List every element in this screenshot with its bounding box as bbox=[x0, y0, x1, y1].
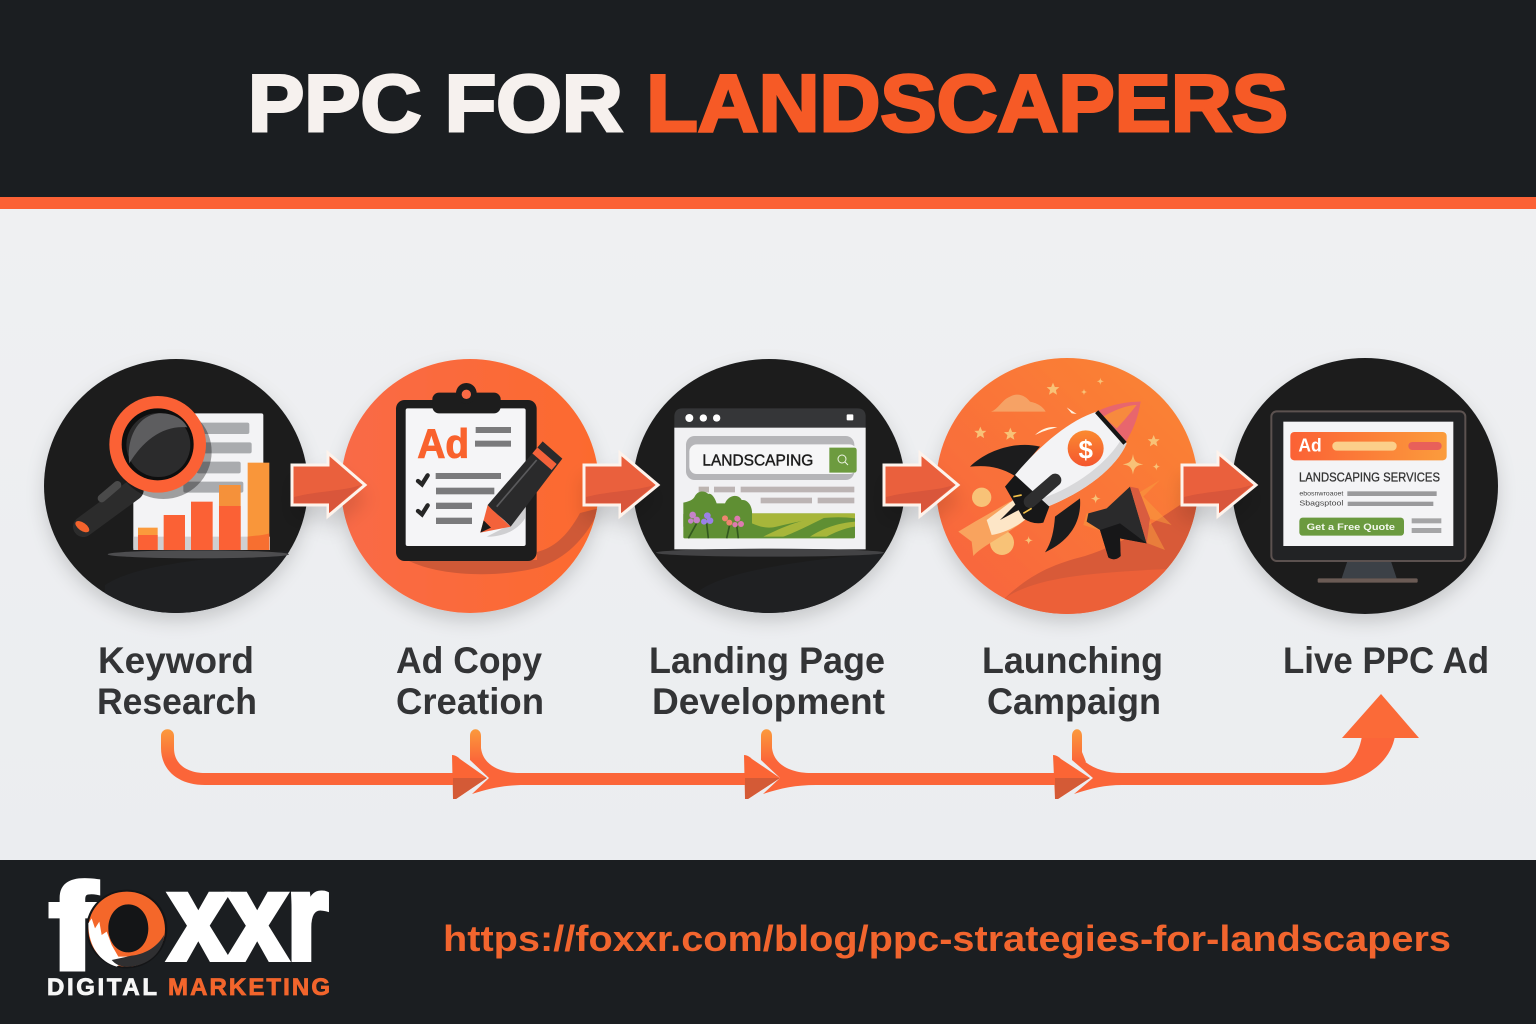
arrow: step 3 to 4 bbox=[884, 453, 958, 516]
label: landing page development bbox=[649, 640, 885, 722]
label: launching campaign: Campaign bbox=[987, 681, 1161, 722]
step 2 circle: ad copy creation bbox=[341, 359, 600, 613]
logo icon: fox tail letter o bbox=[86, 890, 167, 968]
arrow: step 4 to 5 bbox=[1182, 453, 1256, 516]
step 3 circle: landing page development bbox=[633, 359, 910, 620]
footer band bbox=[0, 860, 1536, 1024]
url link text: https://foxxr.com/blog/ppc-strategies-for-landscapers bbox=[443, 918, 1451, 959]
logo: foxxr digital marketing: xxr bbox=[169, 849, 328, 985]
label: launching campaign: Launching bbox=[982, 640, 1163, 681]
label: keyword research: Research bbox=[97, 681, 257, 722]
connector arrow: ad copy to landing page bbox=[470, 729, 780, 799]
icon: browser with search bar and landscape bbox=[656, 408, 884, 557]
step 4 circle: launching campaign bbox=[936, 358, 1200, 620]
header band bbox=[0, 0, 1536, 209]
logo: foxxr digital marketing: f bbox=[49, 859, 97, 995]
logo: foxxr digital marketing: MARKETING bbox=[168, 974, 330, 1001]
icon: rocket with dollar coin: $ bbox=[1078, 434, 1093, 464]
label: landing page development: Landing Page bbox=[649, 640, 885, 681]
icon: monitor showing live ad bbox=[1271, 411, 1465, 583]
logo: foxxr digital marketing: DIGITAL bbox=[47, 974, 157, 1001]
label: ad copy creation bbox=[396, 640, 544, 722]
label: keyword research bbox=[97, 640, 257, 722]
icon: clipboard with ad copy and pencil: Ad bbox=[417, 421, 469, 467]
arrow: step 1 to 2 bbox=[292, 453, 365, 516]
title: PPC FOR LANDSCAPERS bbox=[248, 59, 1288, 149]
icon: clipboard with ad copy and pencil bbox=[396, 383, 562, 561]
icon: browser with search bar and landscape: LANDSCAPING bbox=[702, 452, 813, 469]
connector arrow: launching to live ad bbox=[1072, 694, 1419, 794]
arrow: step 2 to 3 bbox=[584, 453, 658, 516]
connector arrow: landing page to launching bbox=[761, 729, 1090, 799]
connector arrow: keyword research to ad copy bbox=[161, 729, 487, 799]
icon: monitor showing live ad: Ad bbox=[1298, 435, 1322, 456]
label: keyword research: Keyword bbox=[98, 640, 254, 681]
label: ad copy creation: Creation bbox=[396, 681, 544, 722]
label: launching campaign bbox=[982, 640, 1163, 722]
icon: monitor showing live ad: Get a Free Quote bbox=[1307, 522, 1395, 532]
step 1 circle: keyword research bbox=[44, 359, 320, 620]
step 5 circle: live ppc ad bbox=[1232, 358, 1498, 614]
label: ad copy creation: Ad Copy bbox=[396, 640, 542, 681]
icon: monitor showing live ad: LANDSCAPING SERVICES bbox=[1299, 470, 1440, 484]
icon: magnifier over report and bar chart bbox=[73, 396, 289, 558]
page background bbox=[0, 209, 1536, 860]
icon: monitor showing live ad: Sbagsptool bbox=[1299, 499, 1344, 508]
label: landing page development: Development bbox=[652, 681, 885, 722]
label: live ppc ad: Live PPC Ad bbox=[1283, 640, 1489, 681]
logo: foxxr digital marketing bbox=[47, 849, 330, 1001]
icon: monitor showing live ad: ebosnwroaoet bbox=[1299, 490, 1344, 497]
icon: rocket with dollar coin bbox=[958, 378, 1172, 559]
